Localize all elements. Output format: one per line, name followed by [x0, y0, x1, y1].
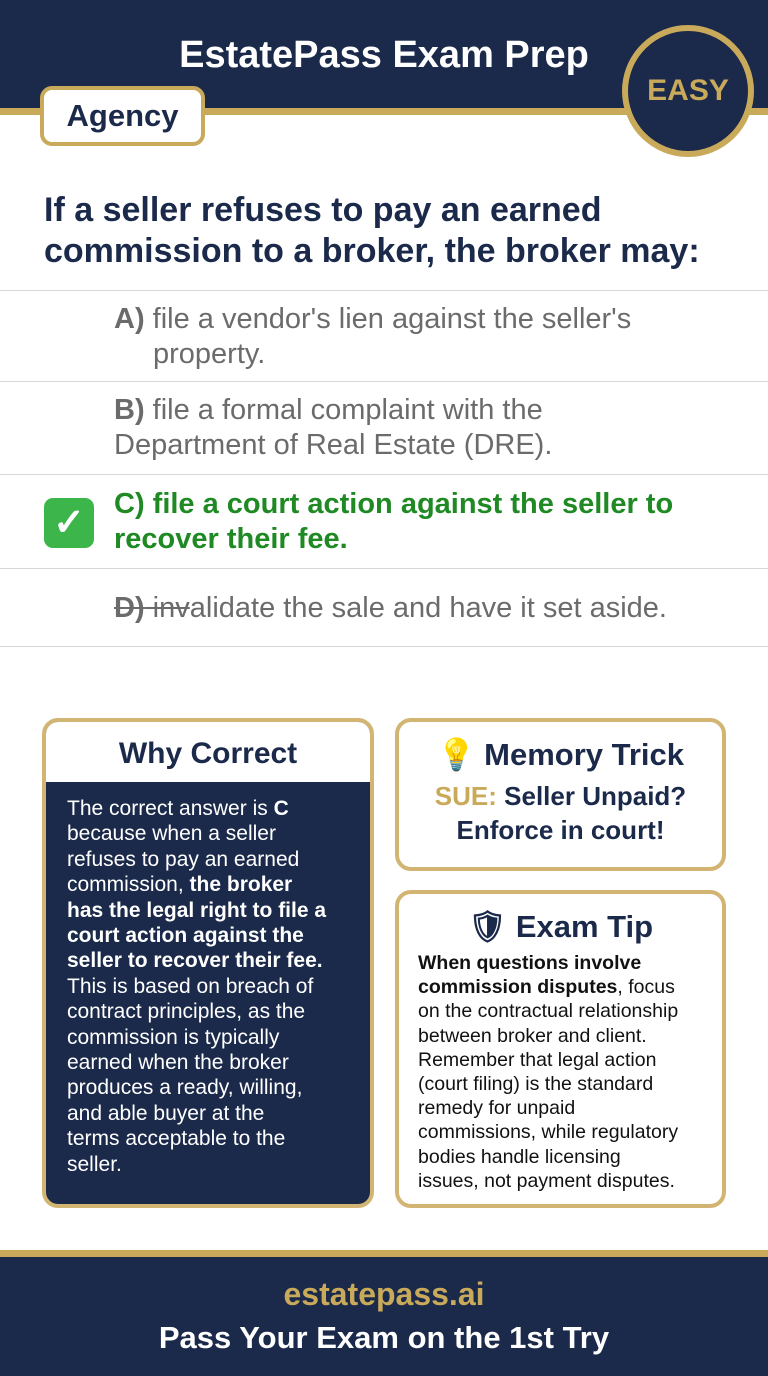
panel: memory trick — [395, 718, 726, 871]
body: because when a seller — [67, 822, 276, 845]
badge: Agency: Agency — [66, 98, 178, 133]
mnemonic: Enforce in court! — [456, 815, 664, 845]
body: commission disputes, focus — [418, 976, 675, 998]
title: EstatePass Exam Prep — [179, 34, 589, 76]
body: This is based on breach of — [67, 975, 313, 998]
option B: Department of Real Estate (DRE). — [114, 429, 552, 461]
option A — [114, 303, 631, 370]
body: has the legal right to file a — [67, 899, 326, 922]
mnemonic — [435, 781, 686, 845]
tagline: Pass Your Exam on the 1st Try — [159, 1320, 609, 1355]
footer — [0, 1250, 768, 1376]
badge: EASY — [622, 25, 754, 157]
option C correct: recover their fee. — [114, 523, 348, 555]
option A: property. — [153, 338, 265, 370]
body: commission, the broker — [67, 873, 292, 896]
body: refuses to pay an earned — [67, 848, 299, 871]
panel: exam tip — [395, 890, 726, 1208]
panel: why correct — [42, 718, 374, 1208]
question: If a seller refuses to pay an earned — [44, 191, 601, 229]
mnemonic: SUE: Seller Unpaid? — [435, 781, 686, 811]
body: Remember that legal action — [418, 1049, 656, 1071]
body: commissions, while regulatory — [418, 1121, 678, 1143]
icon: check: ✓ — [53, 502, 85, 544]
body: on the contractual relationship — [418, 1000, 678, 1022]
option C correct — [114, 488, 673, 555]
body: contract principles, as the — [67, 1000, 305, 1023]
header — [0, 0, 768, 110]
body: produces a ready, willing, — [67, 1076, 302, 1099]
question — [44, 191, 700, 270]
body — [67, 797, 326, 1176]
body — [418, 952, 678, 1192]
option B — [114, 394, 552, 461]
body: The correct answer is C — [67, 797, 289, 820]
option A: A) file a vendor's lien against the seller's — [114, 303, 631, 335]
body: seller. — [67, 1153, 122, 1176]
body: When questions involve — [418, 952, 641, 974]
body: and able buyer at the — [67, 1102, 264, 1125]
heading — [46, 722, 370, 782]
body: terms acceptable to the — [67, 1127, 285, 1150]
body: issues, not payment disputes. — [418, 1170, 675, 1192]
option C correct: C) file a court action against the seller to — [114, 488, 673, 520]
body: between broker and client. — [418, 1025, 647, 1047]
body: (court filing) is the standard — [418, 1073, 653, 1095]
option B: B) file a formal complaint with the — [114, 394, 543, 426]
body: remedy for unpaid — [418, 1097, 575, 1119]
icon: check — [44, 498, 94, 548]
url: estatepass.ai — [283, 1276, 484, 1312]
question: commission to a broker, the broker may: — [44, 232, 700, 270]
body: court action against the — [67, 924, 304, 947]
badge: EASY: EASY — [647, 74, 729, 107]
body: earned when the broker — [67, 1051, 289, 1074]
badge: Agency — [40, 86, 205, 146]
heading: Why Correct — [119, 737, 297, 770]
heading: 💡 Memory Trick — [437, 737, 684, 772]
body: commission is typically — [67, 1026, 279, 1049]
body: seller to recover their fee. — [67, 949, 323, 972]
heading: 🛡 Exam Tip — [468, 909, 653, 944]
body: bodies handle licensing — [418, 1146, 621, 1168]
option D: D) invalidate the sale and have it set aside. — [114, 592, 667, 624]
